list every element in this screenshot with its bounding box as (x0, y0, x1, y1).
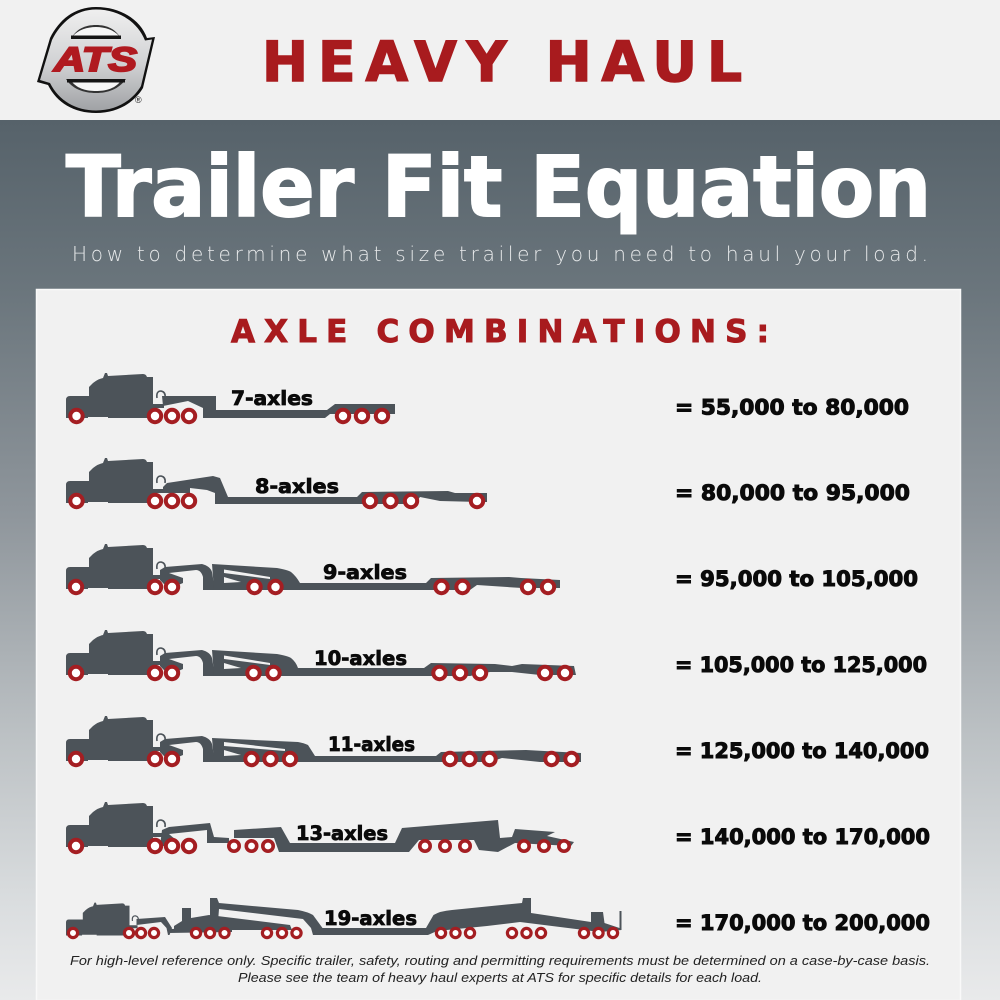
row: 11 axles: = 125,000 to 140,000 (675, 739, 929, 763)
title: Trailer Fit Equation (66, 138, 931, 236)
row: 13 axles: 13-axles (296, 822, 388, 845)
row: 13 axles: = 140,000 to 170,000 (675, 825, 930, 849)
row: 11 axles: 11-axles (328, 733, 415, 756)
row: 10 axles (66, 630, 927, 679)
row: 11 axles (66, 716, 929, 765)
row: 7 axles: = 55,000 to 80,000 (675, 396, 909, 420)
row: 9 axles: 9-axles (323, 561, 407, 584)
logo: ATS (37, 7, 155, 113)
footnote: Please see the team of heavy haul experts at ATS for specific details for each load. (238, 970, 762, 985)
white panel (36, 290, 960, 1000)
row: 7 axles: 7-axles (231, 387, 313, 410)
row: 19 axles: 19-axles (324, 907, 417, 930)
row: 7 axles (66, 373, 909, 422)
row: 8 axles: 8-axles (255, 475, 339, 498)
heading: heavy haul: HEAVY HAUL (262, 30, 742, 94)
row: 19 axles (66, 898, 930, 938)
section heading: AXLE COMBINATIONS: (231, 314, 769, 350)
subtitle: How to determine what size trailer you need to haul your load. (72, 242, 928, 266)
row: 9 axles (66, 544, 918, 593)
row: 10 axles: 10-axles (314, 647, 407, 670)
row: 19 axles: = 170,000 to 200,000 (675, 911, 930, 935)
footnote (70, 953, 930, 985)
row: 9 axles: = 95,000 to 105,000 (675, 567, 918, 591)
logo: ATS: ATS (53, 41, 137, 79)
row: 8 axles (66, 458, 910, 507)
row: 10 axles: = 105,000 to 125,000 (675, 653, 927, 677)
row: 13 axles (66, 802, 930, 852)
footnote: For high-level reference only. Specific trailer, safety, routing and permitting requirements must be determined on a case-by-case basis. (70, 953, 930, 968)
logo: ATS: ® (135, 95, 142, 105)
row: 8 axles: = 80,000 to 95,000 (675, 481, 910, 505)
